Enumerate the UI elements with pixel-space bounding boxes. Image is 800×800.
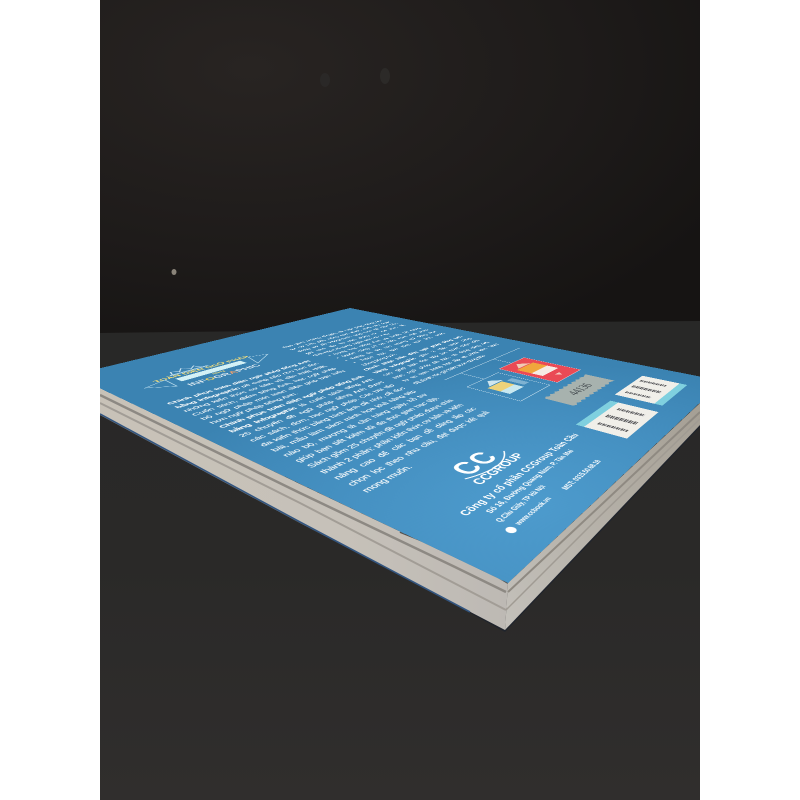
title: cyan band xyxy=(175,361,247,381)
text block: right column: ghi nhớ lâu và vận dụng tốt vào thực tế. xyxy=(303,324,407,355)
text block: left column: Chinh phục toàn diện ngữ pháp tiếng Anh xyxy=(217,375,366,429)
upper barcode: rows xyxy=(625,391,652,398)
text block: left column: Chinh phục toàn diện ngữ pháp tiếng Anh xyxy=(165,360,312,405)
text block: right column: • Đang ôn thi các chứng chỉ tiếng Anh xyxy=(342,331,438,361)
icon: right triangle xyxy=(248,354,269,364)
text block: left column: nào bộ, mượng tả cần hàng ngày, hỗ trợ xyxy=(280,393,430,458)
text block: right column: cao giúp bạn đọc tiếp tục hoàn thiện kiến xyxy=(380,339,482,376)
text block: right column: • Đang học tiếng Anh và muốn hệ thống xyxy=(326,327,422,357)
text block: right column: Bao gồm những chuyên đề ngữ pháp tiếng Anh xyxy=(281,320,384,348)
text block: right column: bằng Infographic gồm 2 tập, phần nâng xyxy=(371,338,473,374)
thumbnail: red book xyxy=(499,357,581,383)
text block: right column: Chinh phục toàn diện ngữ pháp tiếng Anh xyxy=(361,336,464,371)
text block: left column: 25 chuyên đề ngữ pháp tiếng Anh được xyxy=(236,381,386,438)
text block: left column: các sách, đơn, học ngữ pháp. Các bài tập xyxy=(247,384,396,443)
icon: website dot xyxy=(503,526,519,534)
icon: left triangle xyxy=(144,380,178,388)
text block: right column: tự tin hơn trong học tập và công việc. Sách xyxy=(400,343,500,382)
text block: left column: thành 2 phần: phần kiến thức cơ bản và kiến xyxy=(317,403,466,475)
text block: left column: Cuốn sách, điểm tiếng Anh, học ngữ pháp xyxy=(190,367,338,417)
logo: swoosh xyxy=(464,450,506,480)
background: wall, table and page block xyxy=(100,0,700,800)
thumbnail: caption lines xyxy=(507,378,529,385)
company name: Công ty cổ phần CCGroup Toàn Cầu xyxy=(456,432,581,518)
red thumbnail: lower mark xyxy=(555,372,564,376)
text block: left column: Sách gồm 25 chuyên đề ngữ pháp, được chia xyxy=(304,399,455,469)
icon: title crown illustration xyxy=(170,365,209,376)
address line 2: Q.Cầu Giấy, TP Hà Nội xyxy=(494,484,548,523)
text block: right column: dạng sơ đồ Infographic giúp bạn dễ nắm bắt, xyxy=(295,323,399,352)
price tag sticker with handwritten code: 44136 xyxy=(563,382,596,396)
logo: CC group xyxy=(444,448,528,487)
lower barcode: cyan strip xyxy=(576,401,618,427)
text block: right column: • Muốn củng cố lại kiến thức ngữ pháp xyxy=(334,329,430,359)
price tag sticker with handwritten code xyxy=(543,374,615,406)
text block: company name and address xyxy=(456,432,581,534)
barcode sticker: upper xyxy=(615,376,687,406)
thumbnail: outlined book xyxy=(467,373,550,401)
text block: left column: nâng cao để các bạn dễ dàng lắp các xyxy=(330,407,479,481)
text block: left column: giúp bạn tiết kiệm tối đa thời gian học tập. xyxy=(292,396,441,463)
red thumbnail: white band xyxy=(531,366,558,376)
text block: right column: đã được tác giả biên soạn công phu. xyxy=(410,354,488,385)
lower barcode: rows xyxy=(597,422,629,432)
text: tax code: MST: 0315.50.68.18 xyxy=(560,459,603,491)
barcode sticker: lower xyxy=(576,401,659,439)
text block: left column: bằng Infographic là cuốn sách tiếng Anh xyxy=(226,378,376,433)
text block: right column: từ cơ bản đến nâng cao, được trình bày dưới xyxy=(288,321,392,350)
photo: book lying on a dark table xyxy=(100,0,700,800)
title: small yellow text: bằng xyxy=(211,370,226,375)
text block: left column: bài, mẫu làm sách minh họa khả năng tiếp xyxy=(268,390,418,453)
thumbnail: triangle xyxy=(481,378,503,386)
title block xyxy=(151,355,263,387)
text block: right column: Giải thích rõ ràng, ngắn gọn, có ví dụ: xyxy=(311,333,392,357)
text block: right column: bằng tiếng Anh. xyxy=(360,353,398,366)
logo: CC letters: CC xyxy=(444,448,507,479)
red thumbnail: triangle xyxy=(511,361,530,369)
thumbnail: pale band xyxy=(500,384,524,394)
text block: left column: chọn lọc theo nhu cầu, đạt được kết quả xyxy=(344,410,492,487)
text block: right column: • Thích học qua hình ảnh trực quan xyxy=(351,332,447,364)
bracket lines linking text to series thumbnails xyxy=(444,348,520,380)
text block: left column: đa kiến thức bằng hình ảnh dễ nhớ, dễ đọc xyxy=(257,387,407,447)
text block: left column: bộ ngữ pháp mới toàn diện giúp bạn hiểu xyxy=(198,370,347,421)
text block: left column xyxy=(165,360,492,494)
text block: right column: thức ngữ pháp đã học, sử dụng tiếng Anh xyxy=(390,341,491,379)
address line 1: Số 16, Đường Quang Nam, P. Tân Mai xyxy=(484,449,576,515)
text block: left column: bằng Infographic sẽ cung cấp cho bạn đọc xyxy=(173,362,320,409)
back cover panel in perspective xyxy=(72,308,723,583)
text block: right column xyxy=(281,320,500,385)
title: yellow heading: TOÀN DIỆN NGỮ PHÁP xyxy=(151,355,251,383)
text block: left column: mong muốn. xyxy=(359,464,415,494)
red thumbnail: orange band xyxy=(517,363,547,373)
title: infographic wordmark: INFOGRAPHIC xyxy=(185,363,263,387)
website: www.ccbook.vn xyxy=(513,496,554,526)
logo: CCGROUP wordmark: CCGROUP xyxy=(468,452,528,487)
upper barcode: cyan strip xyxy=(654,383,687,406)
thumbnail: yellow band xyxy=(488,381,514,391)
text block: left column: hơn ngữ pháp tiếng Anh. xyxy=(207,392,300,425)
text block: left column: những kiến thức cơ bản và cần thiết nhất. xyxy=(181,365,329,413)
